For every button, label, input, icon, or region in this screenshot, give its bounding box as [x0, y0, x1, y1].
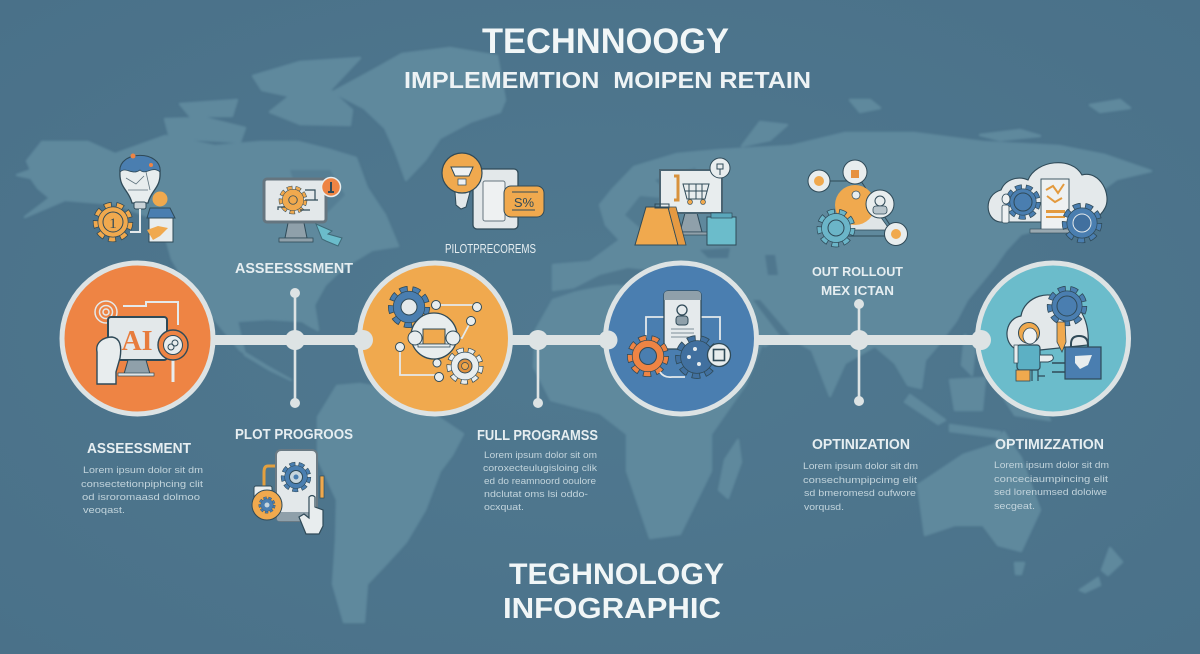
footer title: INFOGRAPHIC — [503, 593, 721, 625]
timeline connector — [212, 288, 982, 408]
person — [1014, 322, 1053, 381]
map: eurasia — [553, 133, 1151, 396]
gear — [1051, 290, 1083, 322]
icon: cloud with gears — [988, 163, 1107, 239]
title: TECHNNOOGY — [482, 22, 729, 61]
text block: full programs: ndclutat oms lsi oddo- — [484, 489, 588, 500]
bulb — [120, 154, 160, 232]
icon: bulb, tablet and speech bubble — [442, 153, 544, 229]
map: hudson bay — [290, 170, 345, 215]
map: south america — [318, 384, 463, 622]
map: greenland — [333, 48, 505, 180]
node and branch: full programs — [528, 330, 548, 408]
bottom lead — [660, 372, 685, 377]
label: pilot programs top: PILOTPRECOREMS — [445, 242, 536, 256]
map: arctic sea island — [742, 122, 787, 146]
footer title: TEGHNOLOGY — [509, 558, 724, 591]
circuit lines — [400, 305, 477, 375]
icon: shopping monitor and bags — [635, 158, 736, 245]
icon: network with gear and people — [808, 160, 908, 246]
icon: phone with gear and hand — [252, 450, 324, 534]
central cloud — [408, 313, 460, 359]
node and branch: assessment — [285, 288, 305, 408]
label: plot progroos: PLOT PROGROOS — [235, 427, 353, 443]
text block: optimizzation: OPTIMIZZATION — [995, 437, 1104, 453]
cloud — [1007, 295, 1088, 350]
text block: full programs: ocxquat. — [484, 502, 524, 513]
text block: full programs: FULL PROGRAMSS — [477, 428, 598, 444]
map: north sea — [625, 168, 700, 228]
icon: monitor with gear and cursor — [264, 178, 342, 246]
white gear — [450, 351, 480, 381]
map: africa — [534, 285, 761, 538]
text block: full programs: Lorem ipsum dolor sit om — [484, 450, 597, 461]
phone — [664, 291, 701, 349]
subtitle: IMPLEMEMTION MOIPEN RETAIN — [404, 67, 811, 93]
label: out rollout: OUT ROLLOUT — [812, 265, 903, 279]
orange gear with number: 1 — [109, 216, 117, 232]
map: north america — [17, 136, 398, 380]
text block: assessment — [81, 441, 203, 516]
text block: assessment: veoqast. — [83, 505, 125, 516]
map: australia — [918, 432, 1040, 551]
blue gear — [392, 290, 426, 324]
orange gear — [631, 339, 665, 373]
text block: optinization: consechumpipcimg elit — [803, 475, 917, 486]
text block: optimizzation: secgeat. — [994, 501, 1035, 512]
monitor with AI: AI — [121, 326, 153, 357]
bag — [1052, 336, 1101, 379]
text block: assessment: od isroromaasd dolmoo — [82, 492, 200, 503]
text block: optinization: OPTINIZATION — [812, 437, 910, 453]
chip badge — [708, 344, 730, 366]
text block: assessment: consectetionpiphcing clit — [81, 479, 203, 490]
map: madagascar — [719, 440, 741, 498]
icon: bulb, tablet and speech bubble: S% — [514, 195, 535, 210]
text block: optinization: Lorem ipsum dolor sit dm — [803, 461, 918, 472]
tie — [1057, 322, 1066, 352]
text block: assessment: ASSEESSMENT — [87, 441, 191, 457]
circle: mobile rollout — [606, 263, 756, 414]
dark blue gear — [679, 339, 715, 375]
connector nodes on circle edges — [353, 330, 991, 350]
map: sea islands — [850, 100, 1130, 140]
circuit line — [123, 302, 178, 325]
footer title — [503, 558, 724, 625]
node and branch: rollout — [849, 299, 869, 406]
circle: AI assessment — [62, 263, 213, 414]
text block: optinization: sd bmeromesd oufwore — [804, 488, 916, 499]
text block: optimizzation: conceciaumpincing elit — [994, 474, 1108, 485]
text block: optinization: vorqusd. — [804, 502, 844, 513]
monitor with AI — [108, 317, 167, 376]
connector lines — [646, 317, 720, 340]
circle: pilot programs — [360, 263, 510, 414]
label: out rollout: MEX ICTAN — [821, 284, 894, 298]
label: assessment top: ASSEESSSMENT — [235, 261, 353, 277]
label: out rollout — [812, 265, 903, 298]
hand — [97, 337, 121, 384]
text block: optimizzation: Lorem ipsum dolor sit dm — [994, 460, 1109, 471]
map: mediterranean sea — [567, 248, 790, 338]
circle: optimization — [978, 263, 1128, 414]
text block: full programs — [477, 428, 598, 513]
text block: full programs: ed do reamnoord ooulore — [484, 476, 596, 487]
text block: optimizzation — [994, 437, 1109, 512]
map: southeast asia islands — [905, 305, 1050, 437]
text block: assessment: Lorem ipsum dolor sit dm — [83, 465, 203, 476]
icon: lightbulb and gear — [97, 154, 175, 242]
magnifier — [158, 330, 188, 382]
text block: optinization — [803, 437, 918, 513]
target icon — [95, 301, 117, 323]
text block: optimizzation: sed lorenumsed doloiwe — [994, 487, 1107, 498]
text block: full programs: coroxecteulugisloing clik — [483, 463, 597, 474]
figure and box — [147, 192, 175, 242]
map: new zealand — [1015, 548, 1122, 592]
network nodes — [396, 300, 482, 382]
map: arctic islands — [165, 58, 360, 142]
